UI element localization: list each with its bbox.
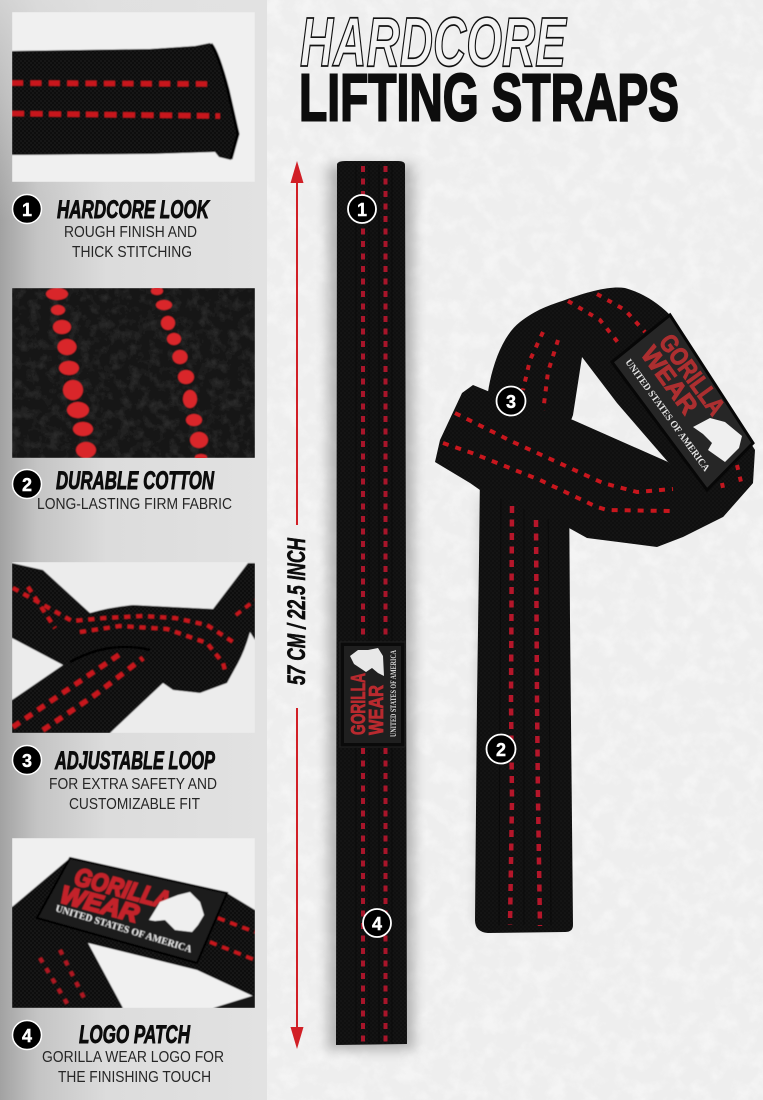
description 4: THE FINISHING TOUCH: [58, 1069, 211, 1086]
description 1: THICK STITCHING: [72, 244, 192, 261]
cross band: [435, 385, 753, 547]
badge 2: [12, 470, 42, 498]
title: [299, 3, 679, 136]
length label: 57 CM / 22.5 INCH: [283, 537, 311, 685]
badge 3: 3: [22, 751, 32, 771]
feature 2 label: [12, 467, 232, 513]
description 3: [49, 776, 217, 813]
badge 1: 1: [22, 200, 32, 220]
logo patch vertical: WEAR: [366, 685, 388, 735]
badge 3 on loop: [496, 386, 526, 416]
badge 1 on strap: [348, 195, 376, 223]
feature 1 label: [12, 194, 210, 261]
badge 4: [12, 1020, 42, 1050]
badge 4 on strap: 4: [372, 914, 382, 934]
badge 2 on tail: 2: [496, 740, 506, 760]
description 1: ROUGH FINISH AND: [64, 224, 197, 241]
description 3: CUSTOMIZABLE FIT: [69, 796, 200, 813]
photo 4: logo patch close-up: WEAR: [57, 881, 142, 928]
logo patch on loop: UNITED STATES OF AMERICA: [623, 357, 712, 474]
heading: hardcore look: HARDCORE LOOK: [57, 196, 210, 224]
logo patch vertical: GORILLA: [348, 673, 370, 735]
photo 2: cotton fabric macro: [12, 287, 255, 460]
logo patch on loop: WEAR: [635, 341, 703, 420]
loop back: [488, 288, 755, 517]
title line 1: hardcore outlined: HARDCORE: [300, 3, 568, 81]
badge 2: 2: [22, 475, 32, 495]
description 2: LONG-LASTING FIRM FABRIC: [37, 496, 232, 513]
length dimension arrow: [283, 161, 311, 1049]
badge 1 on strap: 1: [357, 200, 367, 220]
badge 1: [12, 194, 42, 224]
badge 4 on strap: [363, 909, 391, 937]
heading: adjustable loop: ADJUSTABLE LOOP: [54, 747, 215, 775]
photo 4: logo patch close-up: GORILLA: [71, 863, 173, 915]
badge 3: [12, 746, 42, 774]
logo patch vertical: UNITED STATES OF AMERICA: [388, 649, 398, 737]
right panel textured background: [267, 0, 763, 1100]
looped strap: [435, 288, 755, 933]
heading: durable cotton: DURABLE COTTON: [56, 467, 215, 495]
stitching: [363, 166, 386, 1042]
badge 4: 4: [22, 1026, 32, 1046]
flat strap: [328, 161, 414, 1050]
description 3: FOR EXTRA SAFETY AND: [49, 776, 217, 793]
tail stitching: [510, 506, 540, 926]
description 4: [42, 1049, 224, 1086]
heading: logo patch: LOGO PATCH: [79, 1021, 191, 1049]
arrow upper: [290, 161, 304, 525]
logo patch on loop: GORILLA: [653, 329, 730, 421]
feature 4 label: [12, 1020, 224, 1086]
photo 4: logo patch close-up: UNITED STATES OF AMERICA: [54, 903, 194, 956]
left sidebar background: [0, 0, 267, 1100]
logo patch vertical: [340, 642, 405, 747]
description 1: [64, 224, 197, 261]
strap tail: [475, 470, 573, 933]
arrow lower: [290, 708, 304, 1049]
photo 3: adjustable loop knot: [12, 562, 255, 733]
badge 3 on loop: 3: [506, 392, 516, 412]
feature 3 label: [12, 746, 217, 813]
badge 2 on tail: [486, 734, 516, 764]
description 4: GORILLA WEAR LOGO FOR: [42, 1049, 224, 1066]
photo 4: logo patch close-up: [12, 838, 255, 1008]
logo patch on loop: [612, 315, 753, 490]
photo 1: strap end close-up: [12, 12, 255, 182]
